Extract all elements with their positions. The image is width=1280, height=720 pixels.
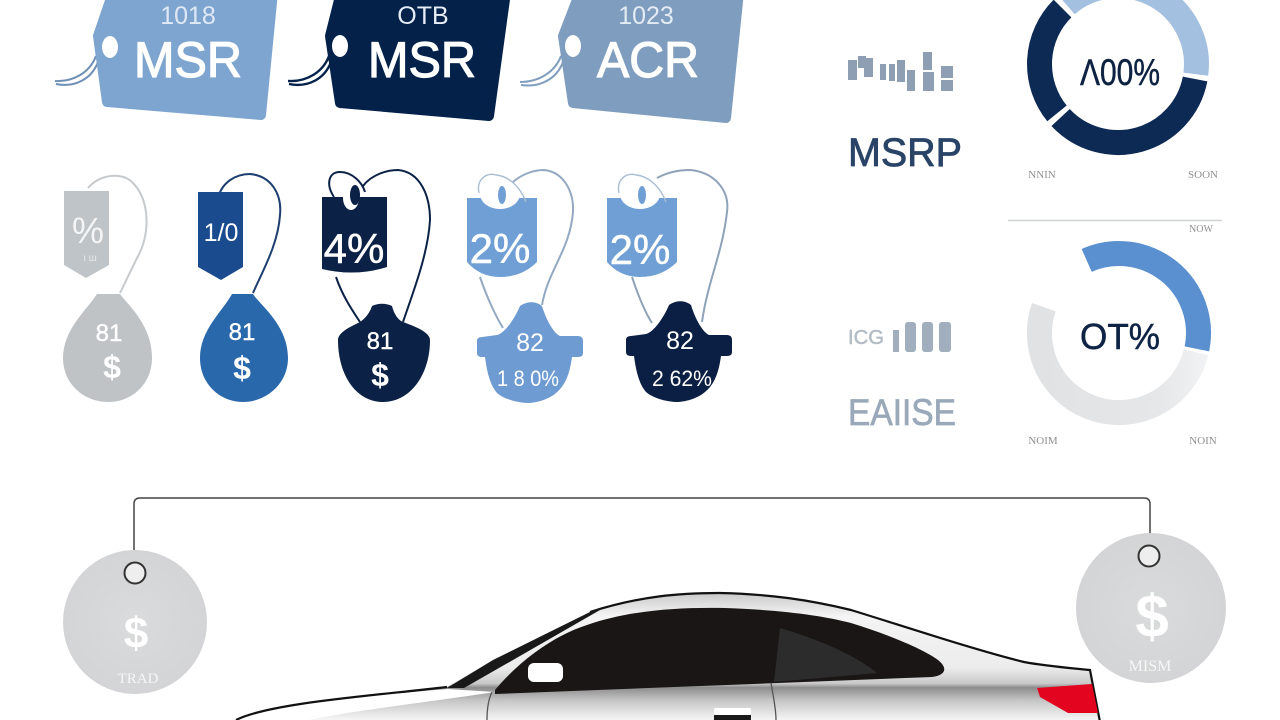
tail light bbox=[1037, 684, 1098, 713]
panel: MSRP summary bbox=[848, 0, 1218, 181]
car illustration bbox=[236, 593, 1100, 720]
tag: OTB MSR bbox=[288, 0, 506, 116]
rear quarter glass bbox=[774, 628, 877, 682]
pair: blue tag and drop: 1/0 bbox=[204, 219, 238, 247]
tag: 1023 ACR: 1023 bbox=[618, 2, 674, 30]
pair: light blue 2% tag and navy bib: 2% bbox=[610, 226, 670, 273]
icon: EAIISE bars cluster: ICG bbox=[848, 327, 884, 349]
coin tag: right: MISM bbox=[1129, 658, 1171, 675]
pair: grey tag and drop: ı ш bbox=[83, 253, 97, 264]
tag: OTB MSR: OTB bbox=[397, 2, 449, 30]
pair: grey tag and drop: % bbox=[72, 210, 104, 251]
coin tag: left: $ bbox=[124, 609, 148, 658]
heading: EAIISE: EAIISE bbox=[848, 392, 956, 433]
windshield pillar bbox=[447, 607, 603, 688]
coin tag: left: TRAD bbox=[118, 671, 159, 687]
coin tag: left bbox=[63, 550, 207, 694]
icon: EAIISE bars cluster bbox=[848, 322, 951, 352]
pair: light blue 2% tag and bib bbox=[467, 170, 583, 403]
panel: EAIISE summary bbox=[848, 254, 1217, 447]
car roof outline bbox=[236, 593, 1100, 720]
tag: 1023 ACR bbox=[520, 0, 739, 118]
heading: MSRP: MSRP bbox=[848, 131, 962, 175]
pair: grey tag and drop: $ bbox=[103, 349, 121, 385]
connector line between coins bbox=[134, 498, 1150, 562]
donut chart: bottom: OT% bbox=[1080, 316, 1160, 357]
pair: navy 4% tag and drop: 81 bbox=[367, 328, 393, 355]
donut chart: top: Λ00% bbox=[1080, 52, 1160, 93]
tag: 1018 MSR: 1018 bbox=[160, 2, 216, 30]
side window bbox=[495, 608, 944, 694]
pair: light blue 2% tag and navy bib: 2 62% bbox=[652, 366, 712, 391]
pair: blue tag and drop: $ bbox=[233, 350, 251, 386]
label: bottom donut right: NOIN bbox=[1189, 435, 1217, 447]
pair: blue tag and drop bbox=[198, 174, 288, 402]
pair: light blue 2% tag and bib: 2% bbox=[470, 225, 530, 272]
donut chart: bottom bbox=[1039, 254, 1198, 413]
tag: 1018 MSR bbox=[55, 0, 273, 115]
pair: grey tag and drop bbox=[63, 176, 152, 402]
pair: light blue 2% tag and bib: 82 bbox=[516, 329, 544, 357]
label: bottom donut left: NOIM bbox=[1028, 435, 1058, 447]
pair: light blue 2% tag and navy bib: 82 bbox=[666, 327, 694, 355]
coin tag: right bbox=[1076, 533, 1226, 683]
label: divider note: NOW bbox=[1189, 224, 1213, 235]
pair: blue tag and drop: 81 bbox=[229, 319, 255, 346]
donut chart: top bbox=[1040, 0, 1196, 143]
pair: light blue 2% tag and bib: 1 8 0% bbox=[497, 366, 559, 391]
icon: MSRP bars cluster bbox=[848, 52, 953, 91]
door handle bbox=[714, 708, 751, 720]
label: top donut left: NNIN bbox=[1028, 169, 1056, 181]
pair: light blue 2% tag and navy bib bbox=[607, 170, 732, 402]
tag: 1018 MSR: MSR bbox=[134, 32, 242, 88]
pair: navy 4% tag and drop bbox=[322, 170, 430, 402]
panel: tag and pendant row bbox=[63, 170, 732, 403]
tag: 1023 ACR: ACR bbox=[597, 32, 699, 88]
tag: OTB MSR: MSR bbox=[368, 32, 476, 88]
pair: navy 4% tag and drop: $ bbox=[371, 357, 389, 393]
door lines bbox=[487, 683, 776, 720]
panel: top price tags bbox=[55, 0, 739, 118]
label: top donut right: SOON bbox=[1188, 169, 1218, 181]
panel: car with hanging price tags bbox=[63, 498, 1226, 720]
side mirror bbox=[528, 663, 563, 682]
coin tag: right: $ bbox=[1135, 583, 1169, 650]
pair: grey tag and drop: 81 bbox=[96, 320, 122, 347]
pair: navy 4% tag and drop: 4% bbox=[324, 225, 384, 272]
car body bbox=[236, 593, 1100, 720]
